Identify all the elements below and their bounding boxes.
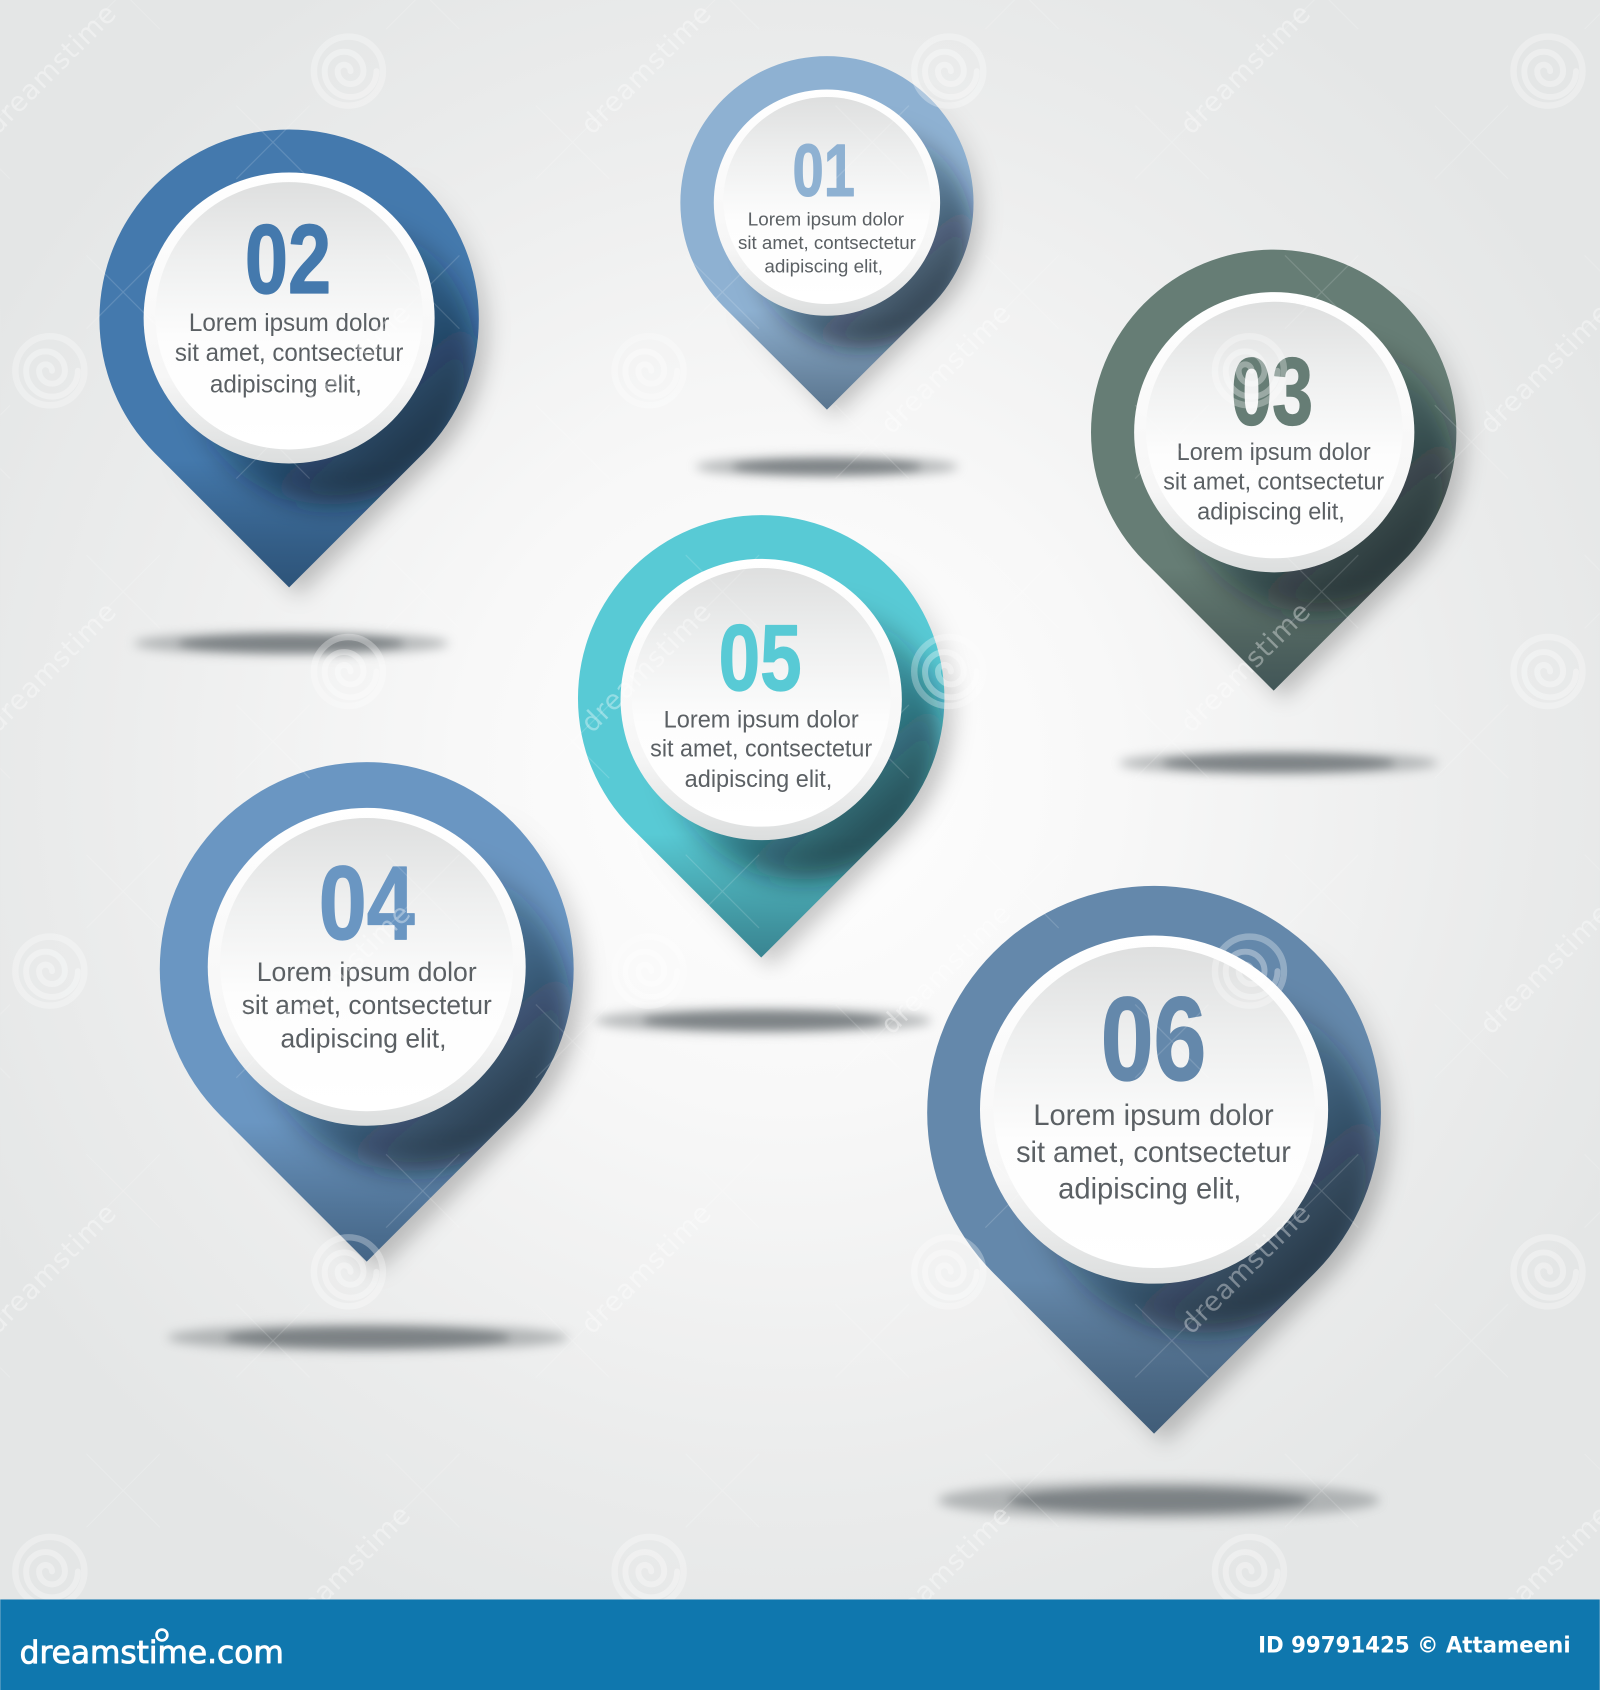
ground shadow: pin 05 xyxy=(595,1008,931,1034)
text: pin 05: adipiscing elit, xyxy=(685,767,832,793)
watermark text: dreamstime xyxy=(1174,596,1317,739)
text: pin 01: sit amet, contsectetur xyxy=(738,232,916,253)
number 06: 06 xyxy=(1101,974,1206,1106)
watermark text: dreamstime xyxy=(1174,0,1317,141)
ground shadow: pin 06 xyxy=(938,1481,1380,1520)
number 03: 03 xyxy=(1231,339,1313,446)
pin 01 xyxy=(680,56,981,416)
ground shadow: pin 04 xyxy=(167,1324,568,1352)
watermark text: dreamstime xyxy=(575,0,717,141)
watermark text: dreamstime xyxy=(274,898,417,1041)
watermark text: dreamstime xyxy=(575,596,717,739)
pin 02 xyxy=(99,129,489,596)
watermark text: dreamstime xyxy=(875,298,1017,440)
pin 03 xyxy=(1091,250,1466,699)
watermark text: dreamstime xyxy=(875,898,1017,1041)
number 01: 01 xyxy=(792,129,855,212)
text: pin 04: Lorem ipsum dolor xyxy=(257,957,477,987)
watermark text: dreamstime xyxy=(274,1500,417,1642)
text: pin 06: sit amet, contsectetur xyxy=(1016,1136,1291,1169)
text: pin 02: adipiscing elit, xyxy=(210,371,362,398)
number 04: 04 xyxy=(319,845,415,962)
footer logo: dreamstime.com xyxy=(20,1635,284,1671)
text: pin 03: Lorem ipsum dolor xyxy=(1177,440,1371,466)
ground shadow: pin 01 xyxy=(695,456,958,477)
text: pin 04: adipiscing elit, xyxy=(280,1024,446,1054)
watermark text: dreamstime xyxy=(1174,1198,1317,1340)
ground shadow: pin 02 xyxy=(134,632,449,655)
watermark text: dreamstime xyxy=(575,1198,717,1340)
pin 06 xyxy=(927,886,1392,1443)
footer credit: ID 99791425 © Attameeni xyxy=(1258,1632,1571,1658)
text: pin 03: sit amet, contsectetur xyxy=(1163,469,1384,495)
number 02: 02 xyxy=(245,204,331,314)
text: pin 01: Lorem ipsum dolor xyxy=(748,208,904,229)
footer logo spiral xyxy=(157,1630,167,1640)
text: pin 01: adipiscing elit, xyxy=(764,256,883,277)
text: pin 03: adipiscing elit, xyxy=(1197,500,1345,526)
footer bar xyxy=(0,1599,1600,1690)
text: pin 04: sit amet, contsectetur xyxy=(242,990,492,1020)
text: pin 02: Lorem ipsum dolor xyxy=(189,310,389,337)
text: pin 06: adipiscing elit, xyxy=(1058,1173,1241,1206)
text: pin 02: sit amet, contsectetur xyxy=(175,340,403,367)
watermark text: dreamstime xyxy=(875,1500,1017,1642)
pin 05 xyxy=(578,515,954,966)
pin 04 xyxy=(160,762,584,1271)
number 05: 05 xyxy=(719,605,802,710)
watermark text: dreamstime xyxy=(274,298,417,440)
text: pin 06: Lorem ipsum dolor xyxy=(1033,1099,1274,1132)
ground shadow: pin 03 xyxy=(1119,751,1438,775)
text: pin 05: Lorem ipsum dolor xyxy=(664,708,859,734)
text: pin 05: sit amet, contsectetur xyxy=(650,737,872,763)
